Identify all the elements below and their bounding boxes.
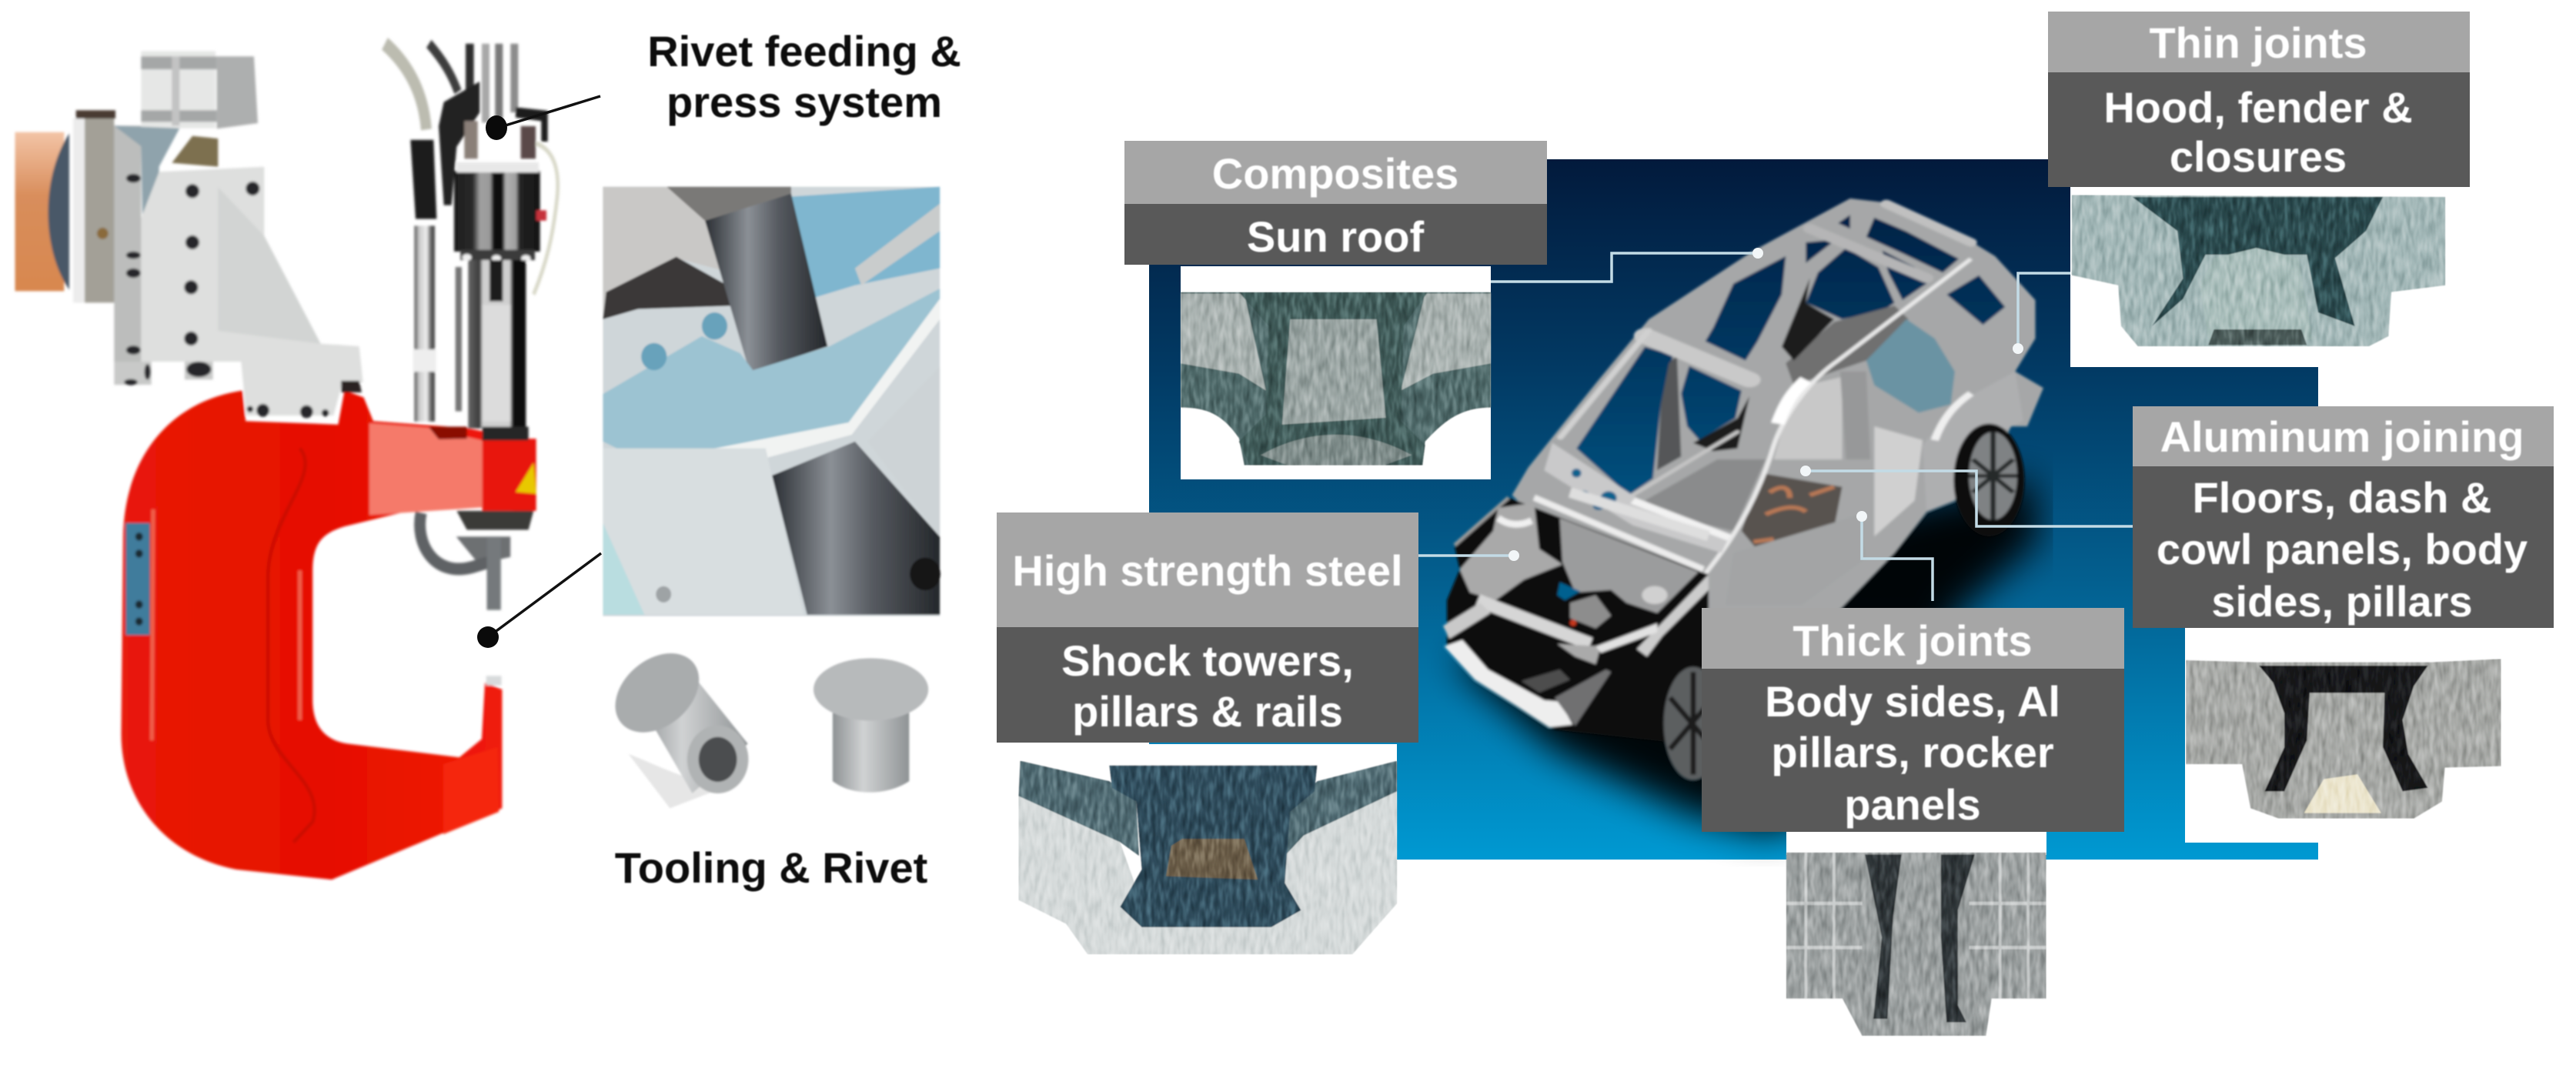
lower tab: [114, 362, 213, 385]
car body in white: [1443, 199, 2043, 835]
wedge and blue steel: [172, 136, 218, 167]
upper body shell: [1512, 199, 2043, 616]
panel: high strength steel: [997, 512, 1418, 958]
rear interior: [1786, 305, 1909, 386]
application bar: floors, dash, cowl: [2133, 466, 2554, 628]
firewall: [1560, 518, 1699, 613]
connector lines: [1418, 248, 2133, 601]
elbow and nose: [420, 512, 510, 686]
engine bay gap: [1557, 583, 1580, 600]
cowl band: [1544, 443, 1729, 553]
panel: aluminum joining: [2133, 406, 2554, 843]
label: rivet feeding and press system: [647, 27, 961, 126]
main bracket: [141, 167, 363, 416]
application bar: hood, fender, closures: [2048, 72, 2470, 187]
box text: closures: [2170, 132, 2347, 181]
white wire: [533, 143, 558, 295]
A pillar foot: [1637, 575, 1709, 656]
box text: [1212, 149, 1458, 261]
application bar: sun roof: [1124, 204, 1547, 265]
label: tooling and rivet: Tooling & Rivet: [615, 843, 927, 892]
box text: Sun roof: [1247, 212, 1424, 261]
box text: pillars, rocker: [1771, 728, 2054, 776]
heading bar: thick joints: [1702, 608, 2124, 669]
lower engine block: [1557, 644, 1601, 664]
robot mount and bracket: [15, 52, 363, 418]
box text: panels: [1844, 780, 1981, 829]
photo: flanged semi-tubular rivets: [601, 637, 928, 808]
cylinder body: [454, 171, 540, 252]
panel: riveting machine: [15, 44, 558, 880]
salmon arm: [369, 423, 483, 515]
rivet, hollow end: [601, 637, 748, 808]
box text: Composites: [1212, 149, 1458, 198]
front wheel rim: [1664, 667, 1722, 780]
car shadow: [1455, 477, 2040, 835]
box text: [2157, 412, 2528, 626]
bolts: [124, 174, 329, 418]
box text: cowl panels, body: [2157, 525, 2528, 573]
red body: [483, 439, 536, 511]
fender edge: [1455, 498, 1509, 545]
box text: Body sides, Al: [1765, 677, 2060, 726]
rivet, solid head: [814, 658, 928, 793]
panel: thin joints: [2048, 12, 2470, 367]
sheet plate: [603, 289, 940, 462]
micrograph: composites joint: [1181, 266, 1491, 479]
box text: sides, pillars: [2211, 577, 2473, 626]
upper punch: [705, 194, 827, 372]
heading bar: composites: [1124, 141, 1547, 204]
front cross beam: [1478, 600, 1591, 644]
micrograph: aluminum joint: [2185, 628, 2554, 843]
black sleeve: [410, 140, 436, 219]
box text: Aluminum joining: [2160, 412, 2524, 461]
press nose: [456, 511, 533, 529]
warning sticker: [516, 462, 536, 494]
crash box: [1555, 669, 1611, 726]
feed cables: [385, 44, 426, 129]
callout line: press system: [486, 96, 600, 140]
application bar: body sides, pillars, rocker panels: [1702, 669, 2124, 832]
robot arm: [15, 132, 64, 291]
lower die: [772, 442, 940, 615]
panel: composites: [1124, 141, 1547, 479]
box text: [2103, 18, 2413, 181]
frame seams: [268, 449, 315, 843]
box text: [1012, 546, 1403, 736]
panel: thick joints: [1702, 608, 2124, 1036]
label: rivet feeding and press system: Rivet feeding &: [647, 27, 961, 75]
blue label: [125, 523, 150, 635]
box text: Floors, dash &: [2193, 473, 2491, 522]
box text: Thick joints: [1793, 616, 2033, 665]
roof detail strokes: [1560, 204, 1971, 495]
callout line: tooling: [477, 553, 601, 648]
box text: [1765, 616, 2060, 829]
upper rods: [466, 44, 474, 122]
front of car: [1443, 492, 1722, 780]
floor: [1645, 459, 1766, 531]
bumper beam: [1445, 640, 1572, 727]
pneumatic cylinders: [141, 52, 216, 129]
micrograph: thick joint: [1786, 832, 2046, 1036]
small nuts: [641, 343, 667, 370]
near A pillar highlight: [1673, 259, 1971, 613]
application bar: shock towers: [997, 627, 1418, 743]
photo: tooling close-up: [603, 187, 941, 616]
lower body: [468, 260, 526, 429]
panel: blue background with car: [1149, 159, 2318, 860]
heading bar: aluminum joining: [2133, 406, 2554, 466]
cowl highlight: [1534, 498, 1703, 569]
micrograph: thin joint: [2070, 187, 2447, 367]
micrograph: high strength steel joint: [1018, 744, 1397, 958]
box text: Thin joints: [2149, 18, 2367, 67]
press column: [369, 44, 558, 529]
box text: Hood, fender &: [2103, 83, 2413, 132]
box text: High strength steel: [1012, 546, 1403, 595]
heading bar: high strength steel: [997, 512, 1418, 627]
box text: pillars & rails: [1072, 687, 1343, 736]
heading bar: thin joints: [2048, 12, 2470, 72]
window openings: [1576, 215, 2005, 495]
label: rivet feeding and press system: press system: [667, 78, 942, 126]
rear wheel: [1953, 424, 2024, 536]
strut tower: [1460, 502, 1562, 600]
clamp: [439, 82, 479, 205]
red C-frame: [122, 391, 536, 880]
mid panels: [1774, 377, 1842, 459]
box text: Shock towers,: [1061, 636, 1354, 685]
left rail: [1443, 603, 1491, 639]
